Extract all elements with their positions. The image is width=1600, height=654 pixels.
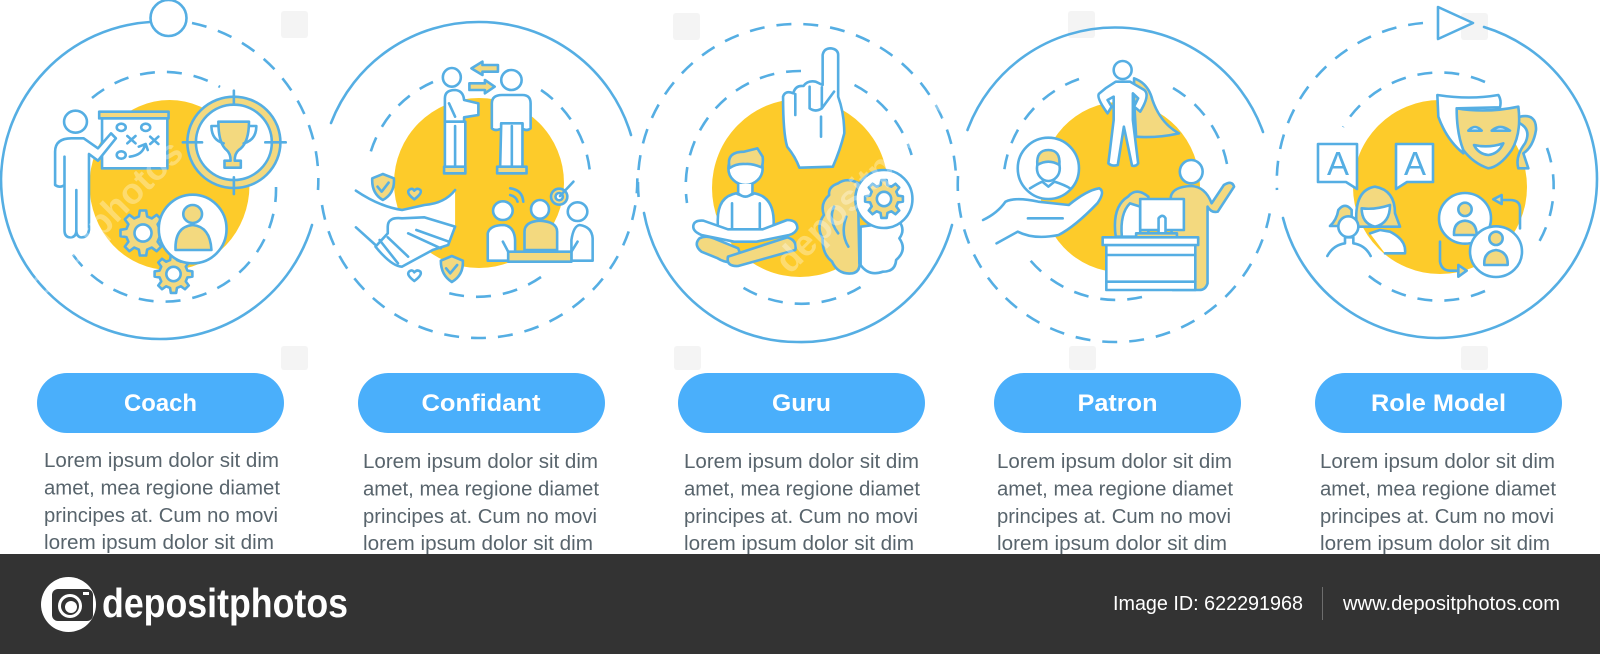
heading pill: Patron: Patron <box>1078 390 1158 417</box>
outer and inner rings <box>322 22 637 338</box>
logo wordmark: depositphotos <box>102 580 348 626</box>
footer bar <box>0 554 1600 654</box>
text block: Coach: principes at. Cum no movi <box>44 505 278 527</box>
watermark lettering <box>0 76 971 336</box>
heading pill: Guru: Guru <box>772 390 831 417</box>
heading pill: Guru <box>678 373 925 433</box>
text block: Guru: lorem ipsum dolor sit dim <box>684 533 914 555</box>
text block: Guru: principes at. Cum no movi <box>684 506 918 528</box>
text block: Coach: lorem ipsum dolor sit dim <box>44 532 274 554</box>
text block: Coach <box>44 450 280 554</box>
icon: two people talking <box>443 62 531 173</box>
icon: team meeting <box>488 182 593 262</box>
text block: Confidant: amet, mea regione diamet <box>363 478 599 500</box>
icon: receptionist at desk <box>1103 160 1234 290</box>
text block: Confidant: principes at. Cum no movi <box>363 506 597 528</box>
icon: gears <box>120 210 192 293</box>
heading pill: Role Model <box>1315 373 1562 433</box>
heading pill: Role Model: Role Model <box>1371 390 1506 417</box>
yellow disc <box>712 99 888 277</box>
panel: Guru <box>638 24 956 342</box>
yellow disc <box>90 100 250 270</box>
icon: speech bubbles with letters <box>1318 144 1433 189</box>
text block: Patron <box>997 451 1233 555</box>
heading pill: Coach <box>37 373 284 433</box>
text block: Patron: principes at. Cum no movi <box>997 506 1231 528</box>
text block: Confidant <box>363 451 599 555</box>
heading pill: Patron <box>994 373 1241 433</box>
icon: coach at strategy board <box>55 111 169 237</box>
icon: hand holding avatar <box>983 138 1102 243</box>
text block: Coach: Lorem ipsum dolor sit dim <box>44 450 279 472</box>
icon: speech bubbles with letters: A <box>1327 145 1349 182</box>
icon: handshake with shields and hearts <box>356 174 463 282</box>
icon: user badge <box>159 195 227 263</box>
heading pill: Confidant: Confidant <box>422 390 540 417</box>
watermark camera marks <box>281 11 1488 370</box>
yellow disc <box>1040 102 1200 272</box>
icon: meditating person <box>693 148 797 266</box>
icon: pointing hand <box>783 48 844 168</box>
panel: Confidant <box>322 22 637 338</box>
icon: caped hero <box>1098 61 1179 166</box>
image id: Image ID: 622291968 <box>1113 593 1303 615</box>
icon: theatre masks <box>1437 95 1536 168</box>
heading pill: Coach: Coach <box>124 390 197 417</box>
text block: Patron: amet, mea regione diamet <box>997 478 1233 500</box>
icon: speech bubbles with letters: A <box>1404 145 1426 182</box>
text block: Guru: amet, mea regione diamet <box>684 478 920 500</box>
heading pill: Confidant <box>358 373 605 433</box>
text block: Role Model: principes at. Cum no movi <box>1320 506 1554 528</box>
text block: Confidant: lorem ipsum dolor sit dim <box>363 533 593 555</box>
text block: Guru: Lorem ipsum dolor sit dim <box>684 451 919 473</box>
website url: www.depositphotos.com <box>1342 593 1560 615</box>
icon: brain with gear <box>819 170 912 274</box>
ring start handle <box>150 0 186 36</box>
text block: Patron: lorem ipsum dolor sit dim <box>997 533 1227 555</box>
outer and inner rings <box>638 24 956 342</box>
text block: Coach: amet, mea regione diamet <box>44 478 280 500</box>
panel: Role Model <box>1277 7 1597 338</box>
text block: Role Model: amet, mea regione diamet <box>1320 478 1556 500</box>
arrow: ring direction marker <box>1438 7 1473 39</box>
yellow disc <box>1353 100 1527 274</box>
text block: Role Model: Lorem ipsum dolor sit dim <box>1320 451 1555 473</box>
text block: Confidant: Lorem ipsum dolor sit dim <box>363 451 598 473</box>
icon: mother and child <box>1327 187 1405 256</box>
watermark lettering: depositphotos <box>767 76 971 281</box>
panel: Patron <box>958 27 1271 342</box>
outer and inner rings <box>1277 23 1597 338</box>
text block: Role Model <box>1320 451 1556 555</box>
yellow disc <box>394 98 564 268</box>
outer and inner rings <box>1 22 318 339</box>
text block: Role Model: lorem ipsum dolor sit dim <box>1320 533 1550 555</box>
panel: Coach <box>1 0 318 339</box>
icon: trophy target <box>183 91 286 194</box>
icon: camera logo <box>41 577 96 632</box>
text block: Guru <box>684 451 920 555</box>
icon: exchanging avatars <box>1439 193 1522 277</box>
outer and inner rings <box>958 27 1271 342</box>
text block: Patron: Lorem ipsum dolor sit dim <box>997 451 1232 473</box>
